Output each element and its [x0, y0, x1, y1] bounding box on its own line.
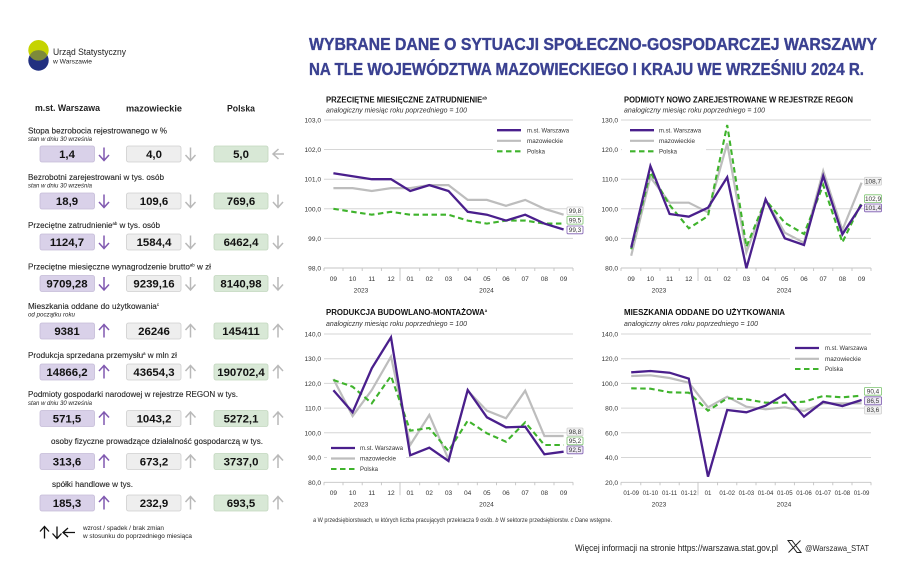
arrow key legend: wzrost / spadek / brak zmian — [82, 525, 164, 532]
x axis labels: 2023 — [652, 502, 667, 508]
row: mieszkania oddane: 26246 — [138, 326, 170, 338]
row: osoby fizyczne — [40, 436, 283, 470]
x axis labels: 01 — [704, 276, 712, 283]
x axis labels: 01-12 — [681, 490, 697, 497]
x axis labels: 01-09 — [854, 490, 870, 497]
row: produkcja sprzedana: w mln zł — [146, 350, 177, 360]
line: Polska — [333, 376, 564, 451]
x axis labels: 09 — [628, 276, 635, 283]
line: mazowieckie — [333, 357, 564, 459]
chart title: ab — [482, 96, 487, 100]
row: podmioty gospodarki narodowej: 571,5 — [53, 414, 82, 426]
x axis labels: 06 — [502, 490, 510, 497]
y axis labels: 120,0 — [601, 356, 618, 363]
row: bezrobotni — [28, 172, 283, 209]
chart subtitle: analogiczny okres roku poprzedniego = 100 — [624, 321, 758, 328]
x axis labels: 10 — [349, 276, 357, 283]
y axis labels: 60,0 — [605, 430, 618, 437]
end value labels — [567, 207, 583, 234]
y axis labels: 120,0 — [304, 381, 321, 388]
chart title: PRZECIĘTNE MIESIĘCZNE ZATRUDNIENIE — [326, 94, 501, 104]
row: bezrobotni: 109,6 — [140, 196, 168, 208]
row: produkcja sprzedana — [28, 350, 283, 380]
end value labels — [864, 387, 882, 414]
x axis labels: 08 — [541, 490, 548, 497]
y axis labels: 80,0 — [308, 480, 321, 487]
table column headers — [35, 103, 256, 114]
row: wynagrodzenie: ab — [190, 262, 195, 268]
x axis labels: 02 — [724, 276, 731, 283]
end value labels: 86,5 — [867, 398, 880, 405]
line: Polska — [333, 209, 564, 224]
y axis labels: 110,0 — [305, 406, 321, 413]
legend — [497, 127, 569, 156]
row: podmioty gospodarki narodowej: 5272,1 — [224, 414, 259, 426]
x axis labels: 01 — [705, 490, 712, 497]
chart subtitle: analogiczny miesiąc roku poprzedniego = 100 — [624, 108, 765, 114]
y axis labels: 98,0 — [308, 266, 321, 272]
row: stopa bezrobocia — [28, 126, 284, 162]
end value labels: 108,7 — [865, 178, 881, 186]
line: mazowieckie — [631, 143, 862, 256]
end value labels: 99,5 — [569, 218, 582, 224]
x axis labels: 01-11 — [662, 490, 678, 497]
line: mazowieckie — [333, 185, 564, 215]
x axis labels: 01 — [407, 276, 414, 283]
x axis labels: 01-08 — [835, 490, 851, 497]
x axis labels: 01 — [407, 490, 414, 497]
footnotes: a W przedsiębiorstwach, w których liczba pracujących przekracza 9 osób. b W sektorze przedsiębiorstw. c Dane wstępne. — [313, 517, 612, 524]
x axis labels: 07 — [820, 276, 827, 283]
row: stopa bezrobocia: 1,4 — [59, 149, 76, 161]
x axis labels — [623, 490, 870, 508]
row: wynagrodzenie: Przeciętne miesięczne wynagrodzenie brutto — [28, 262, 199, 272]
icon: X logo — [788, 540, 801, 552]
legend: Polska — [527, 148, 545, 156]
row: produkcja sprzedana: 190702,4 — [217, 367, 265, 379]
y axis labels: 120,0 — [601, 147, 618, 154]
x axis labels: 09 — [330, 276, 337, 283]
row: osoby fizyczne: 3737,0 — [224, 456, 258, 468]
row: wynagrodzenie: 8140,98 — [220, 278, 262, 290]
legend: Polska — [659, 148, 677, 156]
row: bezrobotni: Bezrobotni zarejestrowani w tys. osób — [28, 172, 164, 182]
x axis labels: 11 — [666, 276, 673, 283]
y axis labels: 140,0 — [304, 332, 321, 338]
x axis labels: 01-05 — [777, 490, 793, 497]
row: wynagrodzenie — [28, 262, 283, 292]
x axis labels: 2023 — [354, 287, 369, 294]
row: wynagrodzenie: w zł — [195, 262, 211, 272]
row: stopa bezrobocia: 4,0 — [146, 149, 162, 161]
chart title: PRODUKCJA BUDOWLANO-MONTAŻOWA — [326, 307, 500, 317]
row: przeciętne zatrudnienie: w tys. osób — [117, 220, 160, 230]
x axis labels: 2023 — [652, 287, 667, 294]
x axis labels: 01-02 — [719, 490, 736, 497]
chart title: MIESZKANIA ODDANE DO UŻYTKOWANIA — [624, 307, 785, 317]
x axis labels: 01-10 — [643, 490, 659, 497]
end value labels: 98,8 — [569, 429, 582, 436]
line: m.st. Warszawa — [333, 173, 564, 230]
x axis labels: 01-06 — [796, 490, 812, 497]
x axis labels: 05 — [781, 276, 789, 283]
legend — [795, 345, 867, 373]
y axis labels: 130,0 — [304, 356, 321, 363]
y axis labels — [601, 332, 618, 487]
row: przeciętne zatrudnienie: 6462,4 — [224, 237, 259, 249]
chart: przeciętne miesięczne zatrudnienie — [304, 94, 583, 294]
row: produkcja sprzedana: 14866,2 — [46, 367, 88, 379]
x axis labels: 09 — [330, 490, 337, 497]
row: produkcja sprzedana: 43654,3 — [133, 367, 175, 379]
x axis labels: 01-04 — [758, 490, 774, 497]
legend: mazowieckie — [659, 138, 695, 145]
x axis labels: 03 — [743, 276, 750, 283]
x axis labels: 2024 — [479, 287, 494, 294]
row: bezrobotni: 769,6 — [227, 196, 255, 208]
x axis labels: 02 — [426, 276, 433, 283]
x axis labels: 2024 — [479, 502, 494, 508]
row: stopa bezrobocia: Stopa bezrobocia rejestrowanego w % — [28, 126, 167, 136]
line: mazowieckie — [631, 375, 862, 411]
line: Polska — [631, 388, 862, 411]
more information link: Więcej informacji na stronie https://warszawa.stat.gov.pl — [575, 542, 778, 553]
x axis labels: 12 — [387, 276, 395, 283]
x axis labels: 12 — [685, 276, 693, 283]
x axis labels: 12 — [387, 490, 395, 497]
row: wynagrodzenie: 9709,28 — [46, 278, 88, 290]
legend — [630, 127, 701, 156]
x axis labels: 06 — [800, 276, 808, 283]
y axis labels — [601, 118, 618, 272]
row: przeciętne zatrudnienie: Przeciętne zatrudnienie — [28, 220, 118, 230]
x axis labels: 01-07 — [815, 490, 832, 497]
chart: produkcja budowlano-montażowa — [304, 307, 583, 508]
x axis labels: 09 — [560, 490, 568, 497]
legend: mazowieckie — [527, 138, 563, 145]
end value labels: 95,2 — [569, 438, 582, 445]
y axis labels — [304, 118, 321, 272]
row: produkcja sprzedana: a — [143, 351, 146, 356]
chart subtitle: analogiczny miesiąc roku poprzedniego = 100 — [326, 108, 467, 114]
y axis labels: 100,0 — [601, 206, 618, 213]
end value labels: 90,4 — [867, 389, 880, 396]
row: mieszkania oddane: Mieszkania oddane do użytkowania — [28, 301, 164, 311]
y axis labels: 103,0 — [304, 118, 321, 124]
legend: m.st. Warszawa — [360, 445, 403, 452]
x axis labels: 07 — [522, 276, 529, 283]
y axis labels: 90,0 — [605, 236, 618, 243]
y axis labels: 100,0 — [304, 430, 321, 437]
y axis labels: 140,0 — [601, 332, 618, 338]
x axis labels: 04 — [464, 276, 472, 283]
row: spółki handlowe — [40, 479, 283, 511]
x axis labels: 10 — [647, 276, 654, 283]
row: osoby fizyczne: 673,2 — [140, 456, 168, 468]
row: stopa bezrobocia: 5,0 — [233, 149, 249, 161]
x axis labels: 09 — [858, 276, 866, 283]
end value labels — [567, 428, 583, 454]
y axis labels: 100,0 — [304, 206, 321, 213]
legend: Polska — [825, 366, 843, 373]
row: mieszkania oddane — [28, 301, 283, 339]
end value labels: 102,9 — [865, 196, 881, 203]
x axis labels: 05 — [483, 276, 491, 283]
x axis labels: 2024 — [777, 502, 792, 508]
row: spółki handlowe: 693,5 — [227, 498, 256, 510]
x axis labels: 10 — [349, 490, 357, 497]
logo: Urząd Statystyczny w Warszawie: w Warszawie — [52, 58, 92, 66]
table column headers: m.st. Warszawa — [35, 103, 101, 113]
legend: Polska — [360, 466, 378, 473]
row: spółki handlowe: 185,3 — [53, 498, 81, 510]
row: mieszkania oddane: 9381 — [54, 326, 80, 338]
line: m.st. Warszawa — [333, 337, 564, 461]
x axis labels: 08 — [541, 276, 548, 283]
logo: Urząd Statystyczny w Warszawie: Urząd Statystyczny — [53, 46, 126, 57]
x axis labels: 03 — [445, 490, 452, 497]
chart: mieszkania oddane do użytkowania — [601, 307, 882, 508]
row: stopa bezrobocia: stan w dniu 30 września — [28, 137, 93, 143]
x axis labels: 08 — [839, 276, 846, 283]
x axis labels: 05 — [483, 490, 491, 497]
row: spółki handlowe: 232,9 — [140, 498, 168, 510]
X handle: @Warszawa_STAT — [805, 543, 869, 553]
x axis labels: 11 — [368, 490, 376, 497]
x axis labels: 11 — [368, 276, 376, 283]
row: przeciętne zatrudnienie: 1584,4 — [137, 237, 172, 249]
row: osoby fizyczne: osoby fizyczne prowadzące działalność gospodarczą w tys. — [51, 436, 263, 446]
legend: m.st. Warszawa — [825, 345, 867, 352]
end value labels: 99,8 — [569, 208, 582, 215]
row: podmioty gospodarki narodowej — [28, 389, 283, 426]
x axis labels — [330, 490, 568, 508]
title — [309, 34, 877, 79]
x axis labels: 02 — [426, 490, 433, 497]
y axis labels: 80,0 — [605, 406, 618, 413]
x axis labels: 01-09 — [623, 490, 640, 497]
chart: podmioty nowo zarejestrowane — [601, 94, 882, 294]
end value labels: 101,4 — [865, 205, 881, 212]
row: przeciętne zatrudnienie: 1124,7 — [50, 237, 84, 249]
x axis labels: 07 — [522, 490, 529, 497]
row: podmioty gospodarki narodowej: 1043,2 — [137, 414, 171, 426]
row: przeciętne zatrudnienie: ab — [113, 221, 118, 226]
chart subtitle: analogiczny miesiąc roku poprzedniego = 100 — [326, 321, 467, 328]
x axis labels — [330, 276, 568, 294]
end value labels: 92,5 — [569, 447, 582, 454]
row: mieszkania oddane: od początku roku — [28, 312, 76, 318]
line: m.st. Warszawa — [631, 166, 862, 268]
x axis labels — [628, 276, 866, 294]
y axis labels: 40,0 — [605, 455, 618, 462]
legend: m.st. Warszawa — [527, 127, 569, 134]
row: spółki handlowe: spółki handlowe w tys. — [52, 479, 133, 489]
legend: mazowieckie — [825, 356, 861, 363]
x axis labels: 09 — [560, 276, 568, 283]
y axis labels: 101,0 — [304, 177, 321, 184]
row: osoby fizyczne: 313,6 — [53, 456, 81, 468]
row: bezrobotni: stan w dniu 30 września — [28, 184, 93, 190]
x axis labels: 03 — [445, 276, 452, 283]
y axis labels: 80,0 — [605, 266, 618, 272]
arrow key legend — [40, 525, 192, 540]
arrow key legend: w stosunku do poprzedniego miesiąca — [82, 533, 192, 540]
x axis labels: 04 — [464, 490, 472, 497]
row: podmioty gospodarki narodowej: Podmioty gospodarki narodowej w rejestrze REGON w tys. — [28, 389, 238, 399]
y axis labels: 130,0 — [601, 118, 618, 124]
row: mieszkania oddane: c — [157, 302, 160, 307]
y axis labels: 90,0 — [308, 455, 321, 462]
end value labels: 99,3 — [569, 227, 582, 234]
x axis labels: 01-03 — [739, 490, 755, 497]
row: podmioty gospodarki narodowej: stan w dniu 30 września — [28, 401, 93, 407]
y axis labels: 102,0 — [304, 147, 321, 154]
legend — [331, 445, 403, 473]
chart title: PODMIOTY NOWO ZAREJESTROWANE W REJESTRZE REGON — [624, 94, 853, 104]
y axis labels — [304, 332, 321, 487]
chart title: a — [485, 308, 487, 313]
end value labels — [864, 177, 882, 212]
legend: mazowieckie — [360, 456, 396, 463]
y axis labels: 99,0 — [308, 236, 321, 243]
legend: m.st. Warszawa — [659, 127, 701, 134]
line: m.st. Warszawa — [631, 371, 862, 477]
table column headers: mazowieckie — [126, 104, 182, 114]
end value labels: 83,6 — [867, 407, 880, 414]
y axis labels: 20,0 — [605, 480, 618, 487]
line: Polska — [631, 125, 862, 249]
y axis labels: 110,0 — [602, 177, 618, 184]
x axis labels: 2024 — [777, 287, 792, 294]
x axis labels: 06 — [502, 276, 510, 283]
row: produkcja sprzedana: Produkcja sprzedana przemysłu — [28, 350, 150, 360]
row: przeciętne zatrudnienie — [28, 220, 283, 250]
x axis labels: 2023 — [354, 502, 369, 508]
table column headers: Polska — [227, 104, 256, 114]
row: wynagrodzenie: 9239,16 — [133, 278, 175, 290]
y axis labels: 100,0 — [601, 381, 618, 388]
x axis labels: 04 — [762, 276, 770, 283]
logo: Urząd Statystyczny w Warszawie — [28, 40, 126, 71]
row: mieszkania oddane: 145411 — [222, 326, 260, 338]
row: bezrobotni: 18,9 — [56, 196, 78, 208]
